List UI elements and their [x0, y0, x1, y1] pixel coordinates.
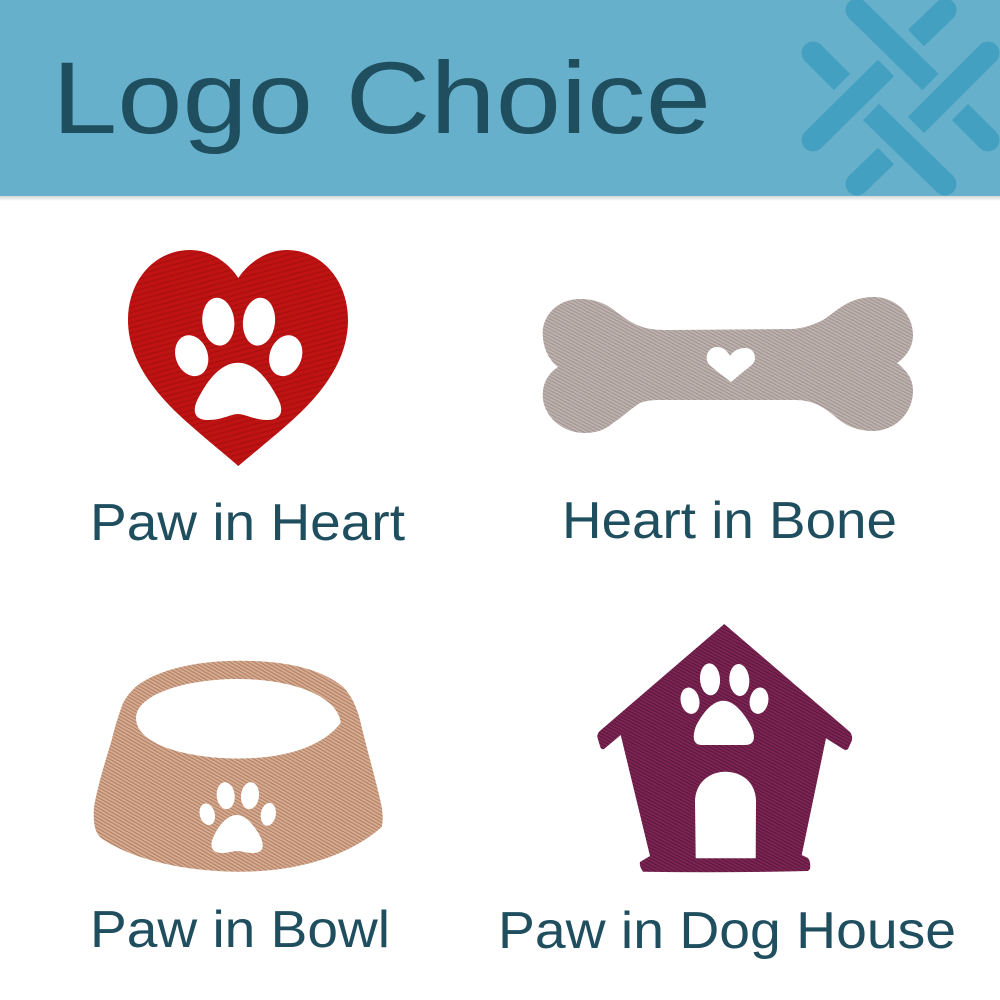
header banner — [0, 0, 1000, 196]
icon: bone with heart — [543, 297, 913, 433]
title: Logo Choice — [52, 41, 711, 155]
logo option: paw in dog house — [498, 624, 956, 960]
icon: bowl with paw — [94, 661, 383, 872]
logo option: paw in bowl — [90, 661, 390, 959]
logo option: paw in heart — [90, 250, 406, 552]
icon: dog house with paw — [597, 624, 852, 872]
logo weave pattern — [802, 0, 1000, 196]
label: Paw in Dog House: Paw in Dog House — [498, 902, 956, 960]
icon: heart with paw — [128, 250, 348, 466]
label: Paw in Bowl: Paw in Bowl — [90, 901, 390, 959]
label: Paw in Heart: Paw in Heart — [90, 494, 406, 552]
logo option: heart in bone — [543, 297, 913, 550]
label: Heart in Bone: Heart in Bone — [562, 492, 897, 550]
